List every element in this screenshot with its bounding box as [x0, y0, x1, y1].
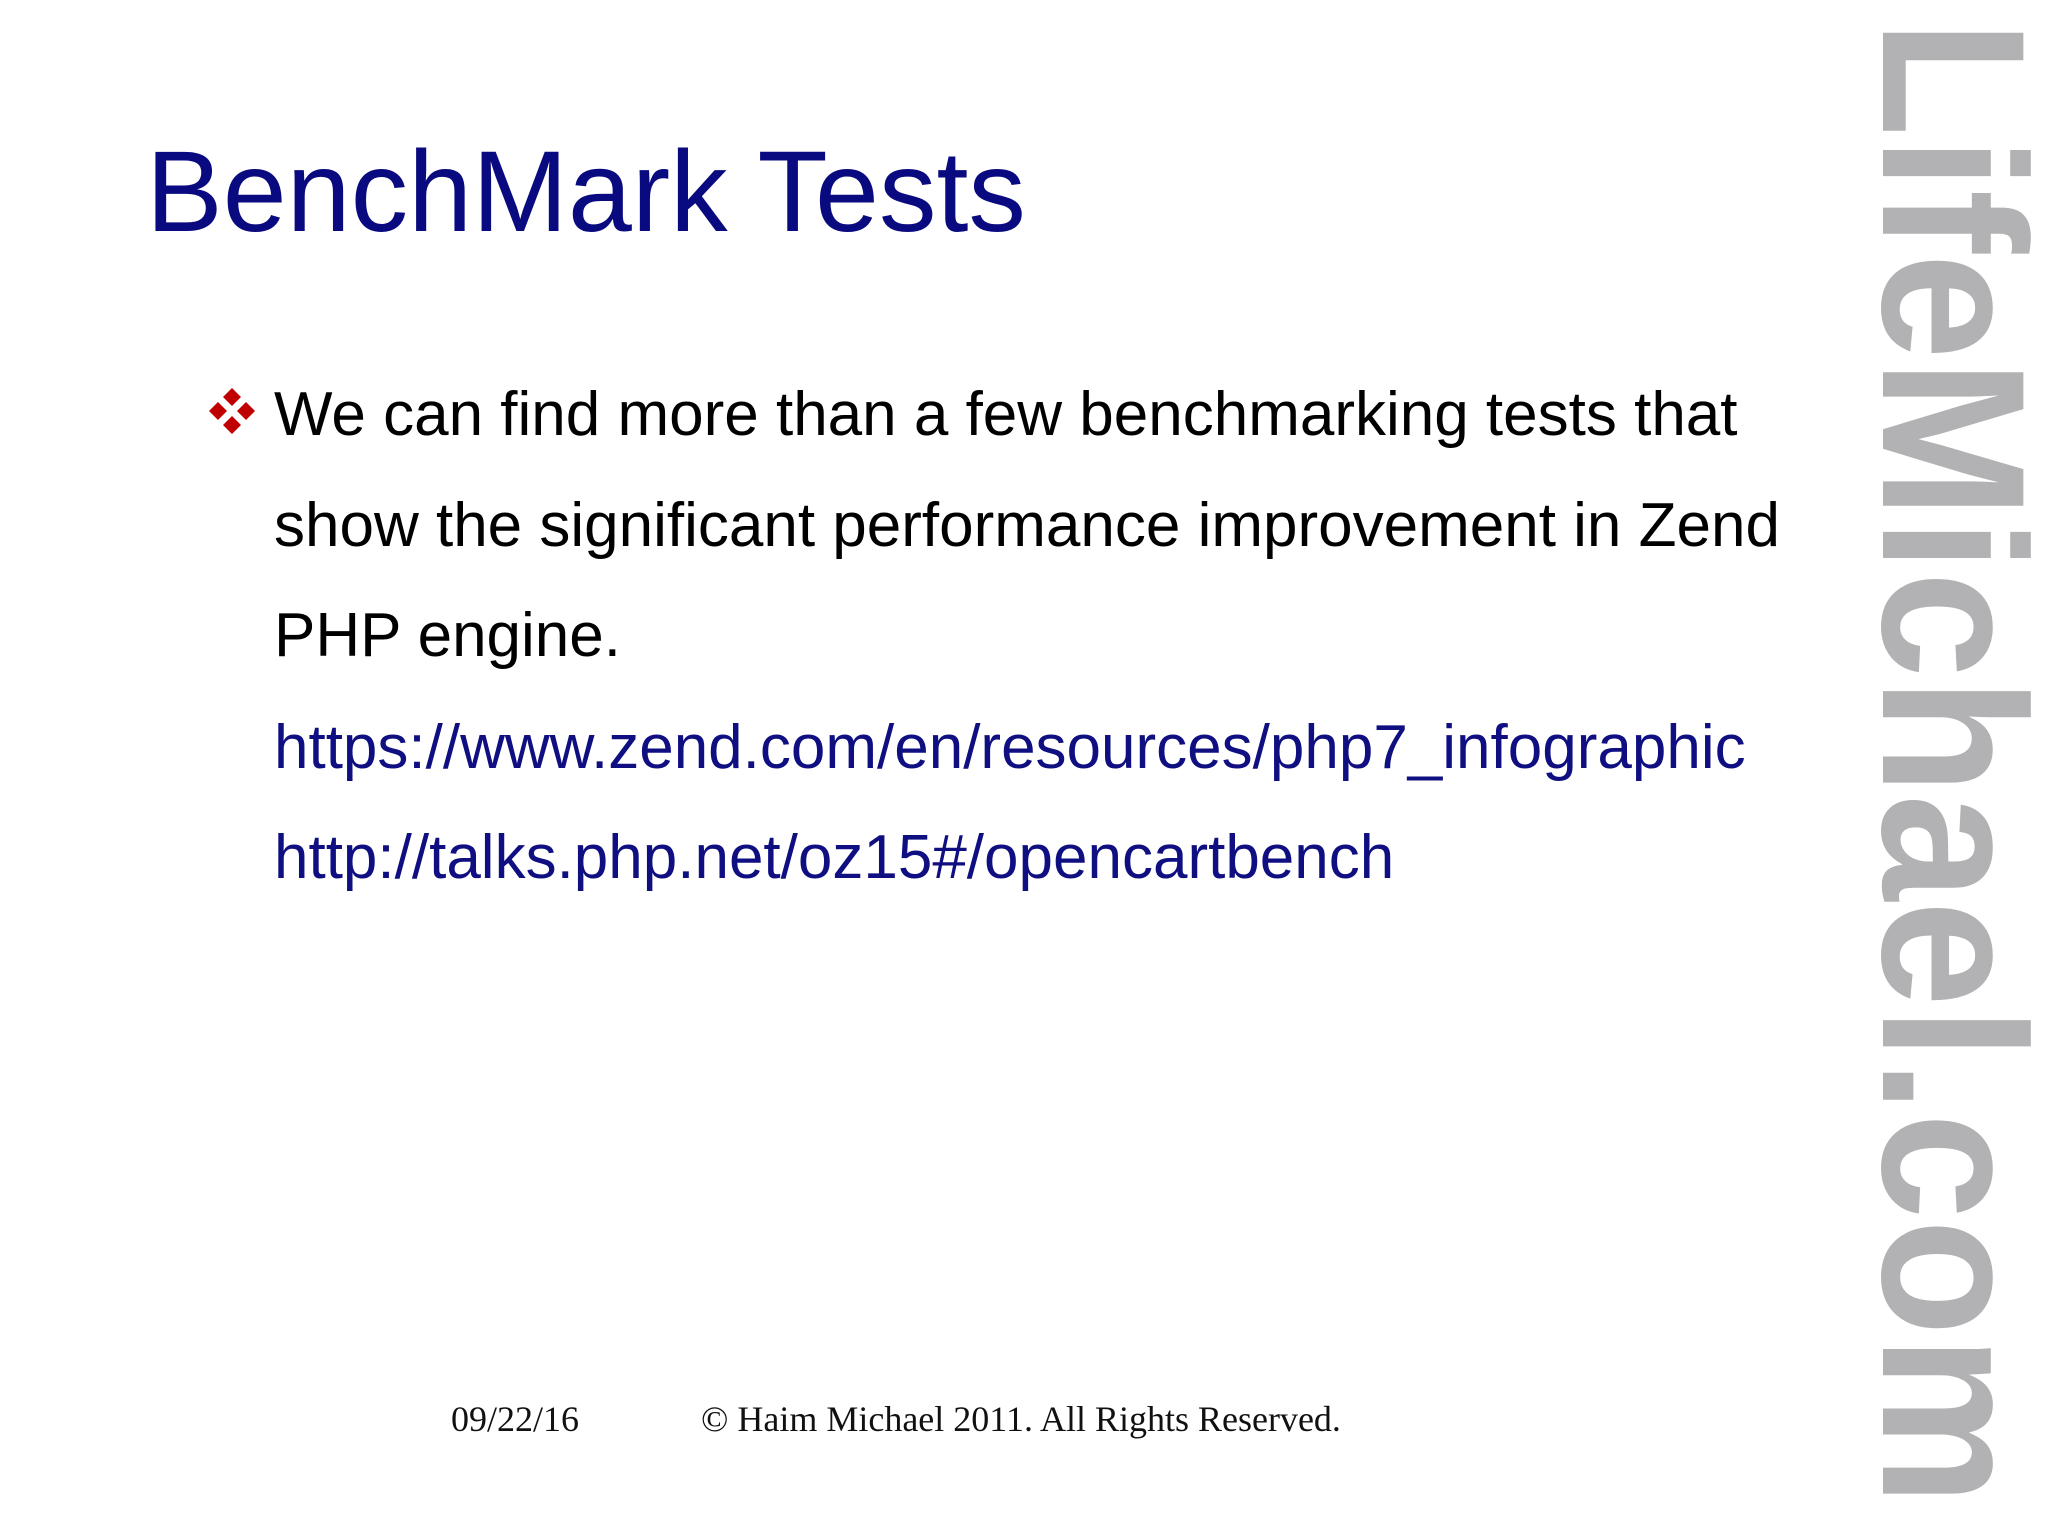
icon: red diamond bullet — [209, 388, 255, 434]
bullet text line 1: We can find more than a few benchmarking tests that — [274, 380, 1738, 449]
footer date: 09/22/16 — [451, 1399, 579, 1439]
footer copyright: © Haim Michael 2011. All Rights Reserved. — [701, 1399, 1341, 1439]
bullet text line 3: PHP engine. — [274, 601, 621, 670]
link 1: https://www.zend.com/en/resources/php7_infographic — [274, 713, 1746, 782]
bullet text line 2: show the significant performance improvement in Zend — [274, 491, 1780, 560]
title: BenchMark Tests — [146, 128, 1026, 256]
link 2: http://talks.php.net/oz15#/opencartbench — [274, 823, 1394, 892]
